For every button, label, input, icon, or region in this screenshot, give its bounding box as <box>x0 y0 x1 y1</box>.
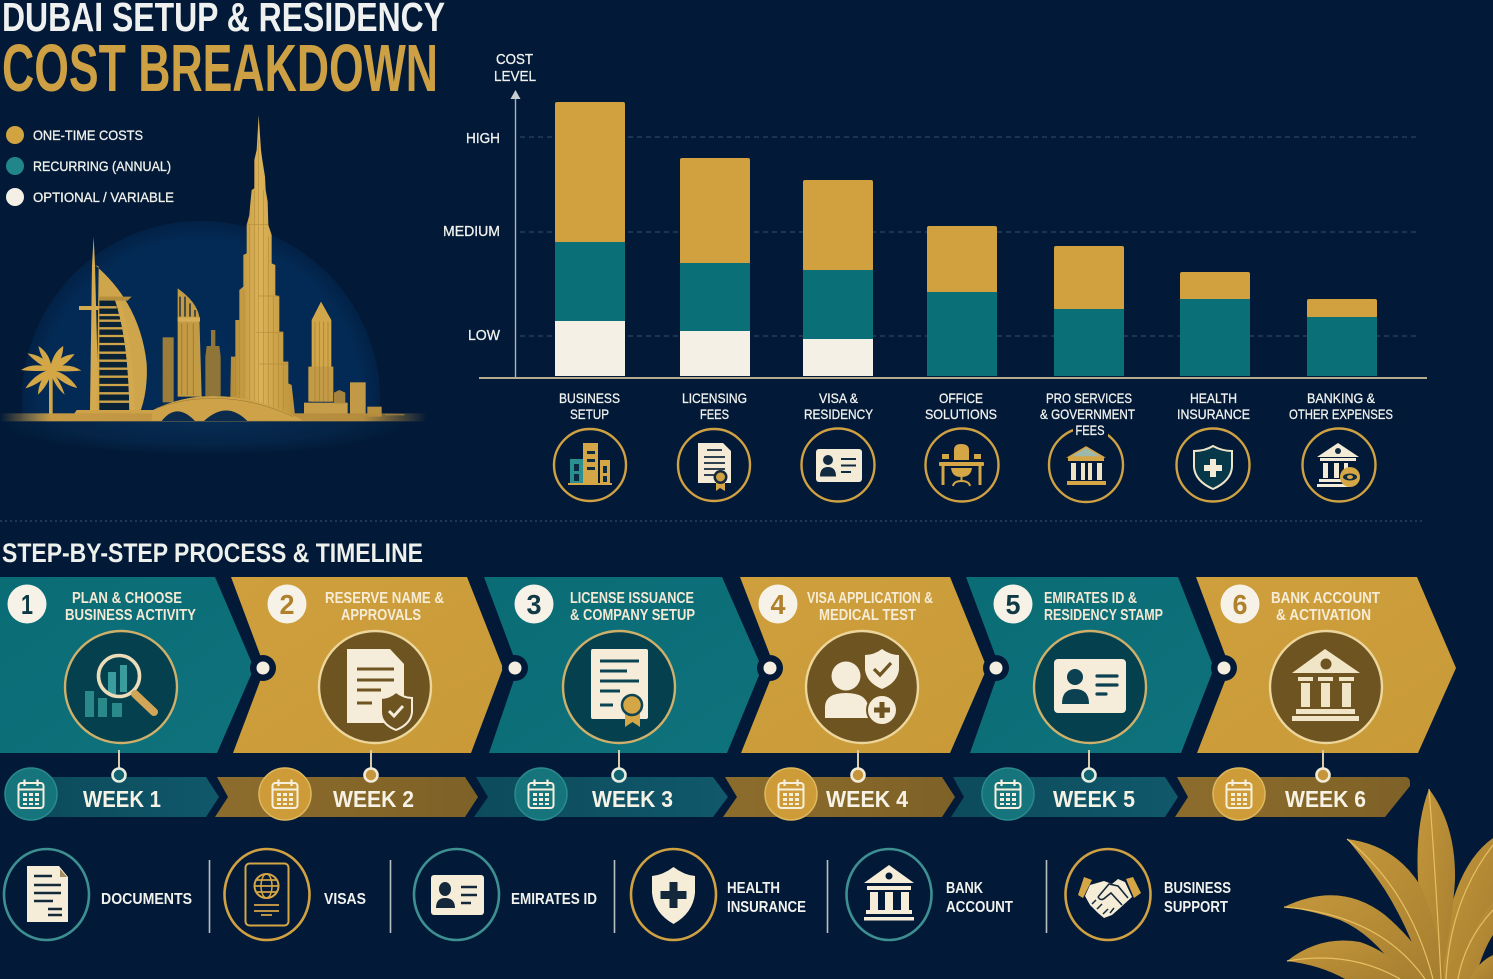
item: business support: SUPPORT <box>1164 899 1228 916</box>
item: emirates id: EMIRATES ID <box>511 891 597 908</box>
category labels: BUSINESS <box>559 390 620 406</box>
legend: RECURRING (ANNUAL) <box>33 159 171 174</box>
step 6 <box>1196 577 1456 753</box>
item: documents <box>4 849 192 940</box>
category labels: BANKING & <box>1307 390 1376 406</box>
step 6: 6 <box>1232 589 1248 620</box>
step 3: & COMPANY SETUP <box>570 607 695 624</box>
step 4: MEDICAL TEST <box>819 607 916 624</box>
panel: required items <box>4 849 1231 940</box>
connector dots <box>250 655 1237 681</box>
category labels: FEES <box>1076 422 1104 438</box>
y axis: LEVEL <box>494 68 536 85</box>
category labels: OFFICE <box>939 390 983 406</box>
week 3: WEEK 3 <box>592 786 673 812</box>
bars <box>555 102 1377 376</box>
step 2: APPROVALS <box>341 607 421 624</box>
step 2 <box>231 577 503 753</box>
item: bank account: BANK <box>946 880 983 897</box>
step 3: 3 <box>526 589 542 620</box>
step 5: RESIDENCY STAMP <box>1044 607 1163 624</box>
step 1: 1 <box>21 589 33 620</box>
heading: process and timeline: STEP-BY-STEP PROCESS & TIMELINE <box>2 538 423 568</box>
week 5: WEEK 5 <box>1053 786 1135 812</box>
category labels: FEES <box>700 406 729 422</box>
bar chart: cost level by category <box>443 51 1427 502</box>
category labels: OTHER EXPENSES <box>1289 406 1393 422</box>
item: documents: DOCUMENTS <box>101 891 192 908</box>
icon: business setup <box>554 429 626 501</box>
category labels: PRO SERVICES <box>1046 390 1132 406</box>
illustration: Dubai skyline <box>2 115 424 449</box>
title <box>2 0 445 106</box>
category labels <box>559 390 1393 438</box>
step 4 <box>740 577 987 753</box>
step 3 <box>484 577 762 753</box>
item: business support: BUSINESS <box>1164 880 1231 897</box>
item: bank account <box>846 849 1013 940</box>
category labels: & GOVERNMENT <box>1040 406 1135 422</box>
category labels: LICENSING <box>682 390 747 406</box>
step 3: LICENSE ISSUANCE <box>570 590 694 607</box>
icon: licensing fees <box>678 429 750 501</box>
category labels: RESIDENCY <box>804 406 874 422</box>
panel: process chevrons <box>0 577 1456 753</box>
towers <box>163 288 404 417</box>
step 1: BUSINESS ACTIVITY <box>65 607 196 624</box>
icon: health insurance <box>1176 428 1250 502</box>
week 3 <box>474 750 728 820</box>
category labels: SETUP <box>570 406 609 422</box>
week 4: WEEK 4 <box>826 786 908 812</box>
illustration: palm leaves <box>1284 789 1493 979</box>
Burj Al Arab <box>73 237 153 415</box>
title: COST BREAKDOWN <box>2 31 438 106</box>
item: visas: VISAS <box>324 891 366 908</box>
step 4: 4 <box>770 589 786 620</box>
panel: weekly timeline <box>5 750 1410 820</box>
week 5 <box>951 750 1178 820</box>
icon: visa and residency <box>802 428 874 502</box>
item: health insurance: INSURANCE <box>727 899 806 916</box>
step 4: VISA APPLICATION & <box>807 590 933 607</box>
step 5: 5 <box>1006 589 1020 620</box>
item: bank account: ACCOUNT <box>946 899 1013 916</box>
legend <box>6 126 174 206</box>
Burj Khalifa <box>230 115 295 415</box>
item: business support <box>1066 849 1231 940</box>
category labels: VISA & <box>819 390 859 406</box>
step 6: & ACTIVATION <box>1276 607 1371 624</box>
icon: banking <box>1302 428 1376 502</box>
step 6: BANK ACCOUNT <box>1271 590 1380 607</box>
icon: office solutions <box>926 428 998 502</box>
legend: ONE-TIME COSTS <box>33 128 143 143</box>
y axis: MEDIUM <box>443 223 500 240</box>
y axis <box>443 51 536 378</box>
icon: PRO services <box>1049 428 1123 502</box>
category labels: HEALTH <box>1190 390 1237 406</box>
step 1 <box>0 577 254 753</box>
week 4 <box>723 750 955 820</box>
y axis: HIGH <box>466 130 500 147</box>
item: health insurance: HEALTH <box>727 880 780 897</box>
week 6: WEEK 6 <box>1285 786 1366 812</box>
item: health insurance <box>631 849 806 940</box>
week 6 <box>1175 750 1410 820</box>
item: emirates id <box>414 849 597 940</box>
step 5 <box>966 577 1214 753</box>
item: visas <box>224 849 366 940</box>
week 1: WEEK 1 <box>83 786 161 812</box>
step 5: EMIRATES ID & <box>1044 590 1137 607</box>
week 2 <box>215 750 478 820</box>
legend: OPTIONAL / VARIABLE <box>33 190 174 205</box>
bridge and ground <box>0 396 427 421</box>
y axis: COST <box>496 51 533 68</box>
y axis: LOW <box>468 327 501 344</box>
category labels: SOLUTIONS <box>925 406 997 422</box>
step 1: PLAN & CHOOSE <box>72 590 182 607</box>
week 1 <box>5 750 219 820</box>
step 2: 2 <box>280 589 294 620</box>
category labels: INSURANCE <box>1177 406 1250 422</box>
icon: palm tree <box>21 346 81 414</box>
week 2: WEEK 2 <box>333 786 414 812</box>
step 2: RESERVE NAME & <box>325 590 444 607</box>
